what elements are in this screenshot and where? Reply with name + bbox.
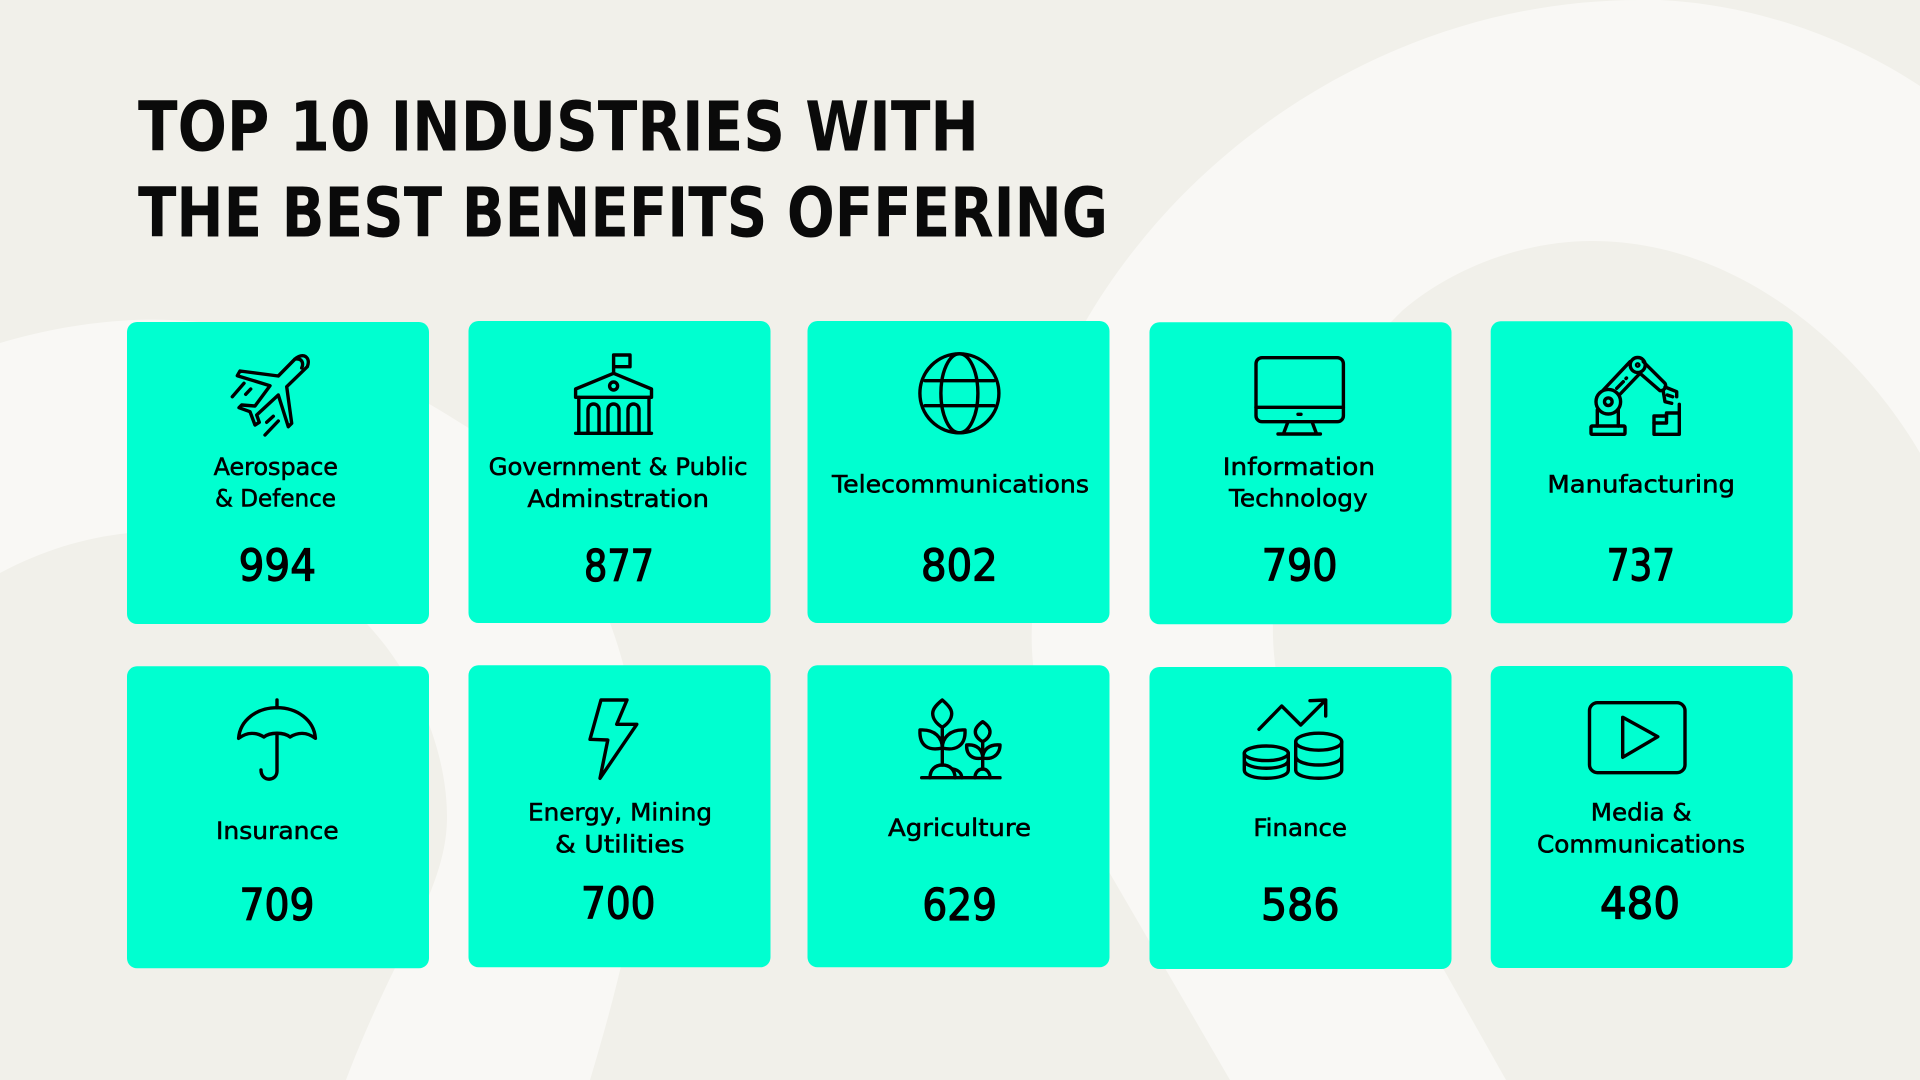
panel: Insurance	[127, 666, 429, 968]
title: THE BEST BENEFITS OFFERING	[138, 174, 1108, 254]
panel: Agriculture	[808, 665, 1110, 967]
title: TOP 10 INDUSTRIES WITH	[138, 88, 979, 168]
label: Energy, Mining	[528, 799, 712, 827]
panel: Information Technology	[1150, 322, 1452, 624]
label: & Defence	[215, 485, 336, 513]
icon: coins and growth arrow	[1244, 700, 1342, 778]
label: Technology	[1228, 485, 1368, 513]
value: 700	[581, 879, 656, 930]
value: 737	[1607, 541, 1675, 592]
label: Communications	[1537, 831, 1745, 859]
icon: umbrella	[239, 700, 315, 779]
label: Manufacturing	[1547, 471, 1735, 499]
value: 802	[921, 541, 998, 592]
label	[528, 799, 712, 859]
label: Information	[1223, 453, 1375, 481]
icon: airplane	[232, 356, 308, 435]
icon: lightning bolt	[590, 700, 637, 778]
value: 480	[1600, 879, 1680, 930]
icon: plants	[920, 700, 1000, 778]
value: 877	[584, 541, 654, 592]
label: & Utilities	[555, 831, 684, 859]
icon: computer monitor	[1256, 358, 1343, 434]
value: 709	[240, 880, 314, 931]
label: Telecommunications	[831, 471, 1089, 499]
label: Aerospace	[214, 453, 338, 481]
value: 790	[1262, 541, 1338, 592]
value: 586	[1261, 880, 1340, 931]
panel: Telecommunications	[808, 321, 1110, 623]
icon: government building	[576, 355, 652, 433]
value: 994	[239, 541, 316, 592]
panel: Government & Public Adminstration	[468, 321, 770, 623]
title	[138, 88, 1108, 254]
panel: Media & Communications	[1491, 666, 1793, 968]
label: Agriculture	[888, 814, 1031, 842]
label	[1537, 799, 1745, 859]
label: Adminstration	[527, 485, 709, 513]
panel: Finance	[1150, 667, 1452, 969]
label: Finance	[1253, 814, 1347, 842]
label: Government & Public	[489, 453, 748, 481]
label	[214, 453, 338, 513]
value: 629	[922, 880, 997, 931]
icon: robotic arm	[1591, 358, 1679, 434]
label: Insurance	[216, 817, 339, 845]
icon: globe	[920, 354, 999, 433]
icon: video play button	[1590, 703, 1685, 773]
label	[1223, 453, 1375, 513]
panel: Energy, Mining & Utilities	[468, 665, 770, 967]
label	[489, 453, 748, 513]
panel: Manufacturing	[1491, 321, 1793, 623]
label: Media &	[1591, 799, 1692, 827]
panel: Aerospace & Defence	[127, 322, 429, 624]
